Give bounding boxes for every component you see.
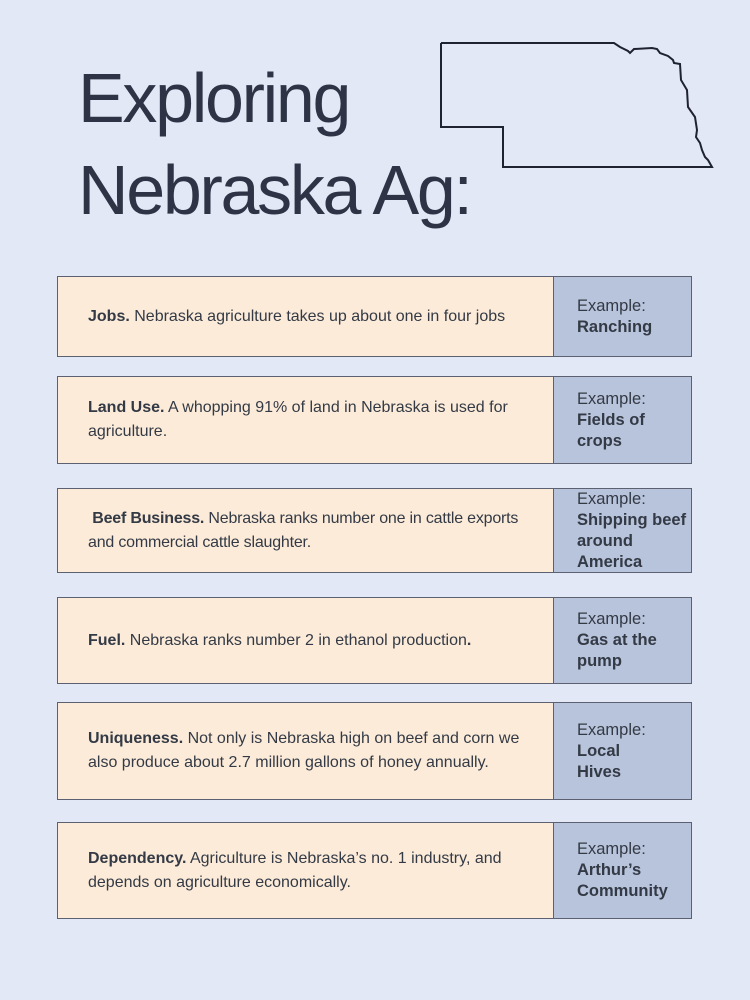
row: fuel	[57, 597, 692, 684]
row: fuel: Example:	[577, 610, 646, 628]
row: uniqueness: Hives	[577, 762, 621, 780]
row: beef business: around	[577, 532, 633, 550]
title: Exploring	[78, 59, 349, 137]
row: uniqueness	[57, 702, 692, 800]
row: dependency: Community	[577, 882, 668, 900]
row: jobs: Jobs. Nebraska agriculture takes up about one in four jobs	[88, 308, 505, 324]
row: fuel: Gas at the	[577, 631, 657, 649]
row: land use: crops	[577, 432, 622, 450]
row: land use: Example:	[577, 390, 646, 408]
row: dependency	[57, 822, 692, 919]
row: uniqueness: Local	[577, 742, 620, 760]
row: dependency: Example:	[577, 840, 646, 858]
icon: Nebraska map outline	[440, 42, 714, 168]
row: jobs: Example:	[577, 296, 646, 314]
row: fuel: Fuel. Nebraska ranks number 2 in ethanol production.	[88, 632, 471, 648]
row: beef business: Shipping beef	[577, 510, 686, 528]
row: uniqueness: Uniqueness. Not only is Nebraska high on beef and corn we also produce about 2.7 million gallons of honey annually.	[88, 730, 519, 771]
row: beef business: Beef Business. Nebraska ranks number one in cattle exports and commercial cattle slaughter.	[88, 510, 518, 550]
row: beef business: Example:	[577, 490, 646, 508]
row: dependency: Arthur’s	[577, 861, 641, 879]
row: jobs	[57, 276, 692, 357]
row: land use: Land Use. A whopping 91% of land in Nebraska is used for agriculture.	[88, 399, 508, 440]
row: uniqueness: Example:	[577, 720, 646, 738]
row: land use	[57, 376, 692, 464]
row: beef business: America	[577, 552, 642, 570]
row: jobs: Ranching	[577, 318, 652, 336]
title	[78, 59, 471, 229]
row: fuel: pump	[577, 652, 622, 670]
title: Nebraska Ag:	[78, 151, 471, 229]
row: land use: Fields of	[577, 410, 645, 428]
row: dependency: Dependency. Agriculture is Nebraska’s no. 1 industry, and depends on agriculture economically.	[88, 850, 502, 890]
row: beef business	[57, 488, 692, 573]
